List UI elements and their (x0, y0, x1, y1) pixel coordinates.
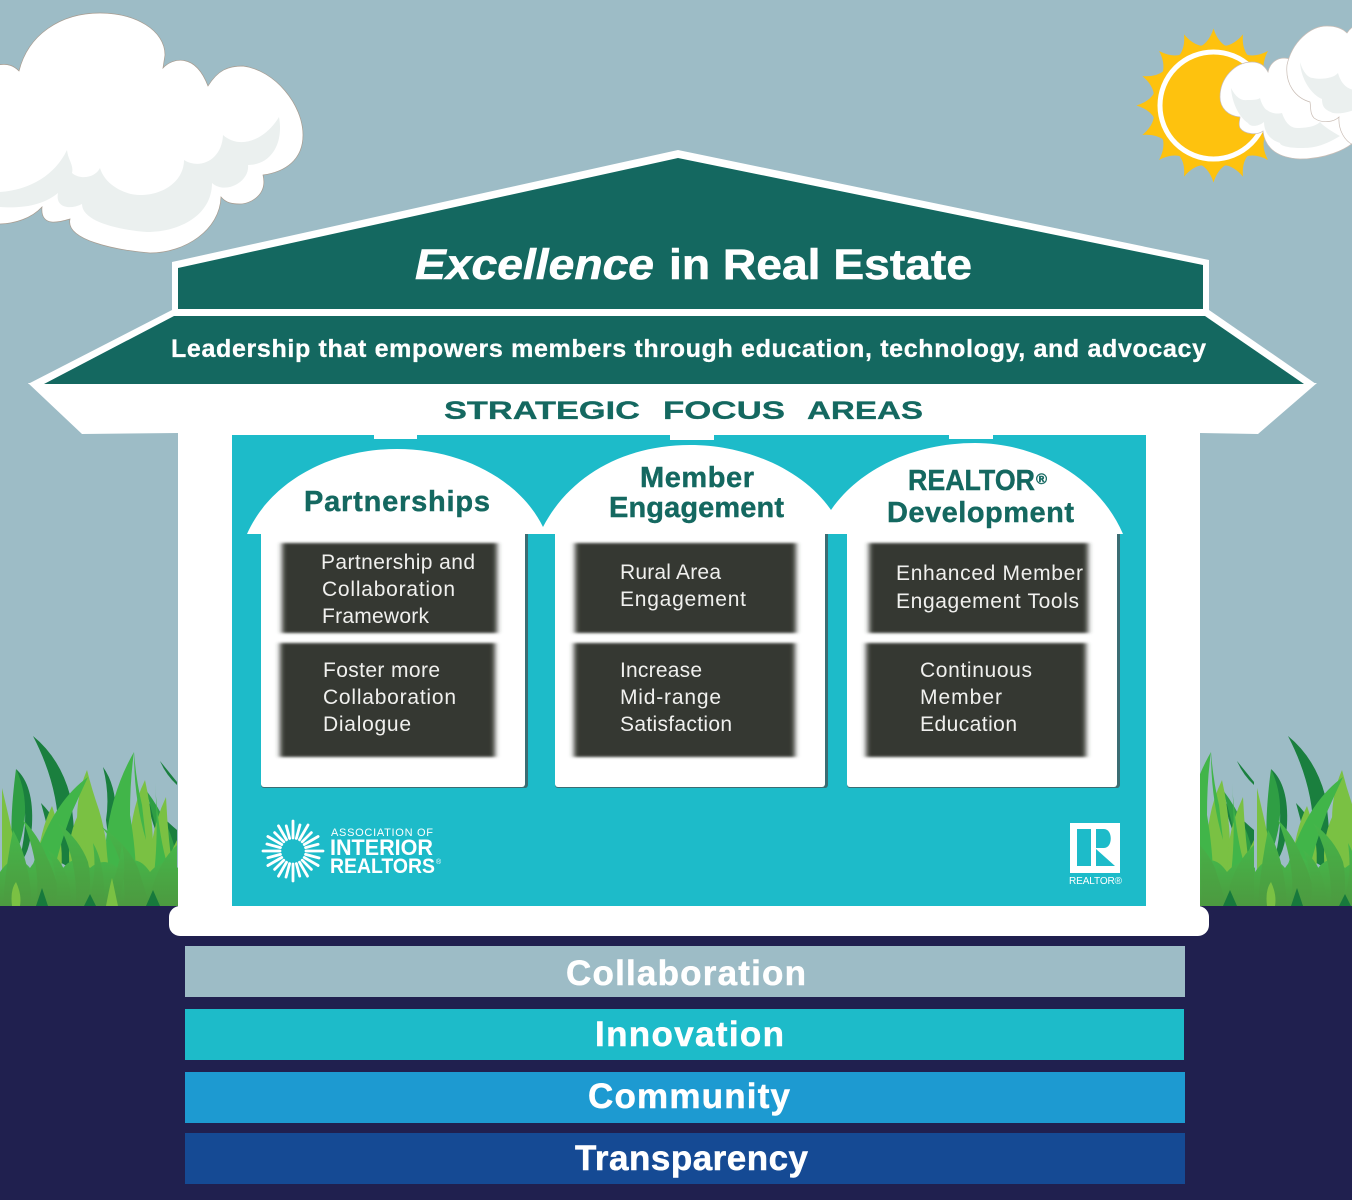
heading: strategic focus areas: FOCUS (663, 397, 785, 425)
panel: realtor development: Education (920, 713, 1017, 736)
heading: strategic focus areas: STRATEGIC (444, 397, 640, 425)
title: in Real Estate (669, 241, 972, 289)
panel: partnerships: Dialogue (323, 713, 411, 736)
arched column headers: ® (1036, 471, 1047, 488)
value bar: community (185, 1072, 1185, 1123)
panel: member engagement: Increase (620, 659, 702, 682)
value bar: innovation: Innovation (595, 1015, 784, 1054)
arched column headers: Development (887, 497, 1074, 529)
arched column headers: Partnerships (304, 486, 490, 518)
heading: strategic focus areas (444, 397, 923, 425)
logo: association of interior realtors: ASSOCIATION OF (331, 827, 433, 839)
panel: member engagement: Satisfaction (620, 713, 732, 736)
panel: partnerships: Framework (322, 605, 430, 628)
house body (178, 430, 1200, 910)
panel: member engagement: Rural Area (620, 561, 721, 584)
roof: lower slope (28, 310, 1316, 384)
arched column headers (247, 443, 1123, 534)
value bar: collaboration: Collaboration (566, 954, 806, 993)
logo: association of interior realtors: REALTORS (330, 855, 435, 878)
grass: right (1200, 736, 1352, 906)
logo: association of interior realtors (263, 821, 442, 881)
logo: realtor: REALTOR® (1069, 876, 1123, 887)
value bar: transparency: Transparency (575, 1139, 809, 1178)
cloud: top left (0, 13, 303, 253)
arched column headers: Member (640, 462, 754, 494)
logo: realtor (1069, 823, 1123, 887)
house base (169, 906, 1209, 936)
panel: partnerships: Partnership and (321, 551, 475, 574)
arched column headers: REALTOR (908, 465, 1035, 497)
logo: association of interior realtors: INTERIOR (330, 835, 433, 860)
panel: partnerships: Foster more (323, 659, 440, 682)
panel: realtor development: Continuous (920, 659, 1032, 682)
panel: realtor development: Member (920, 686, 1002, 709)
panel: member engagement (555, 530, 828, 788)
cloud: top right (1220, 26, 1352, 159)
panel: realtor development: Engagement Tools (896, 590, 1079, 613)
panel: partnerships (261, 530, 528, 788)
arched column headers: Engagement (609, 492, 784, 524)
value bar: collaboration (185, 946, 1185, 997)
heading: strategic focus areas: AREAS (807, 397, 923, 425)
column tabs (374, 433, 993, 440)
icon: sun (1136, 28, 1290, 182)
title (415, 241, 972, 289)
roof: pediment (172, 150, 1209, 316)
ground (0, 906, 1352, 1200)
panel: member engagement: Engagement (620, 588, 746, 611)
logo: association of interior realtors: ® (436, 858, 442, 866)
panel: realtor development (847, 530, 1120, 788)
panel: member engagement: Mid-range (620, 686, 721, 709)
panel: partnerships: Collaboration (322, 578, 455, 601)
value bar: community: Community (588, 1077, 791, 1116)
value bar: innovation (185, 1009, 1184, 1060)
title: Excellence (415, 241, 654, 289)
panel: realtor development: Enhanced Member (896, 562, 1083, 585)
value bar: transparency (185, 1133, 1185, 1184)
icon: starburst (263, 821, 323, 881)
panel: partnerships: Collaboration (323, 686, 456, 709)
grass: left (0, 736, 178, 906)
subtitle: Leadership that empowers members through education, technology, and advocacy (171, 335, 1206, 363)
roof: entablature band (28, 383, 1317, 434)
teal panel (232, 435, 1146, 906)
